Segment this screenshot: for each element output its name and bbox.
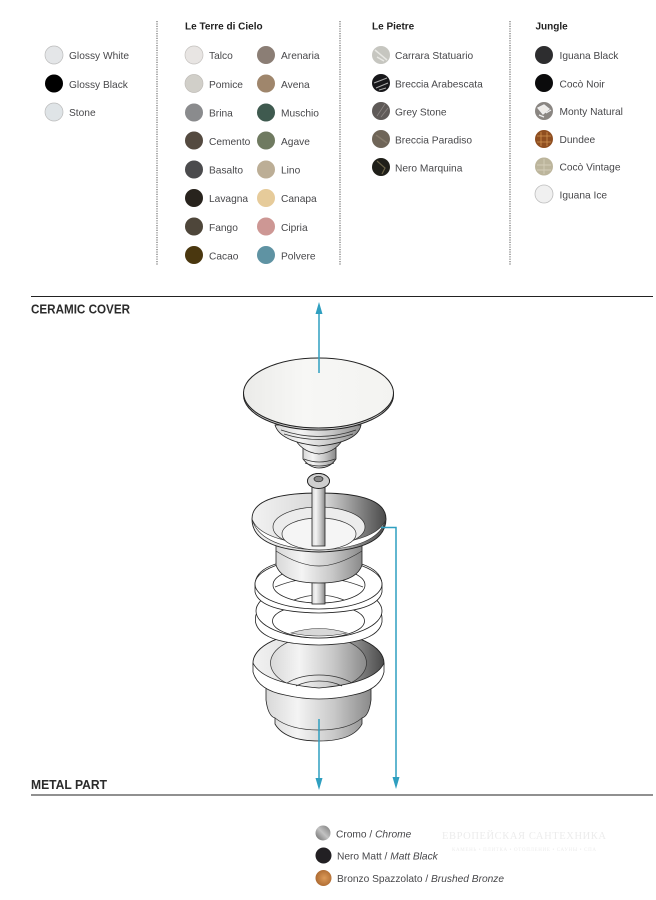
panel: Le Terre di Cielo: Lino [281, 166, 301, 176]
panel: Le Terre di Cielo: Cemento [209, 137, 251, 148]
panel: Le Terre di Cielo: Polvere [281, 252, 316, 262]
panel: Le Pietre [372, 22, 483, 176]
panel: Jungle: Cocò Noir [560, 80, 605, 90]
heading: metal part: METAL PART [31, 778, 107, 792]
panel: Le Pietre: Grey Stone [395, 108, 447, 118]
column dividers [157, 21, 510, 265]
arrow: flange down [381, 528, 400, 789]
panel: Le Terre di Cielo: Muschio [281, 108, 319, 120]
panel: Le Pietre: Breccia Paradiso [395, 136, 472, 146]
panel: Le Pietre: Le Pietre [372, 22, 415, 32]
panel: Jungle: Monty Natural [560, 107, 623, 118]
panel: Le Terre di Cielo: Arenaria [281, 51, 320, 62]
legend: metal finishes [316, 826, 504, 886]
panel: Le Terre di Cielo: Fango [209, 223, 238, 234]
panel: Jungle: Iguana Black [560, 51, 619, 62]
panel: Le Terre di Cielo: Brina [209, 108, 233, 120]
panel: Le Pietre: Breccia Arabescata [395, 80, 483, 90]
watermark: КАМЕНЬ • ПЛИТКА • ОТОПЛЕНИЕ • САУНЫ • СПА [452, 848, 596, 853]
ring 2 [256, 584, 382, 645]
illustration: exploded drain [244, 358, 394, 741]
ring 1 [255, 558, 382, 613]
panel: Le Terre di Cielo: Agave [281, 137, 310, 148]
watermark: ЕВРОПЕЙСКАЯ САНТЕХНИКА [442, 830, 606, 842]
panel: Le Terre di Cielo: Cipria [281, 223, 308, 234]
metal body [253, 632, 384, 741]
flange and neck [252, 474, 386, 583]
panel: glossy finishes [45, 46, 129, 121]
panel: Le Terre di Cielo: Cacao [209, 252, 239, 262]
panel: glossy finishes: Stone [69, 108, 96, 119]
legend: metal finishes: Cromo / Chrome [336, 830, 412, 840]
panel: Le Terre di Cielo: Pomice [209, 80, 243, 91]
watermark [442, 830, 606, 853]
panel: Jungle [535, 22, 623, 203]
panel: Jungle: Jungle [536, 22, 568, 32]
panel: Jungle: Iguana Ice [560, 190, 607, 202]
arrow: body down [316, 719, 322, 790]
panel: Le Terre di Cielo: Basalto [209, 166, 243, 176]
panel: Jungle: Dundee [560, 135, 596, 146]
panel: Le Terre di Cielo: Canapa [281, 194, 317, 205]
panel: Le Terre di Cielo: Talco [209, 51, 233, 62]
panel: glossy finishes: Glossy Black [69, 80, 129, 91]
panel: Le Terre di Cielo: Lavagna [209, 194, 248, 205]
panel: Le Pietre: Carrara Statuario [395, 51, 473, 62]
panel: Jungle: Cocò Vintage [560, 162, 621, 174]
panel: Le Pietre: Nero Marquina [395, 164, 463, 174]
arrow: cover up [316, 302, 322, 373]
legend: metal finishes: Nero Matt / Matt Black [337, 852, 439, 862]
panel: Le Terre di Cielo: Avena [281, 80, 310, 91]
heading: ceramic cover: CERAMIC COVER [31, 302, 130, 316]
panel: Le Terre di Cielo [185, 22, 320, 264]
panel: Le Terre di Cielo: Le Terre di Cielo [185, 22, 263, 32]
legend: metal finishes: Bronzo Spazzolato / Brushed Bronze [337, 874, 504, 885]
ceramic cap [244, 358, 394, 468]
stem [308, 474, 330, 604]
panel: glossy finishes: Glossy White [69, 51, 129, 62]
